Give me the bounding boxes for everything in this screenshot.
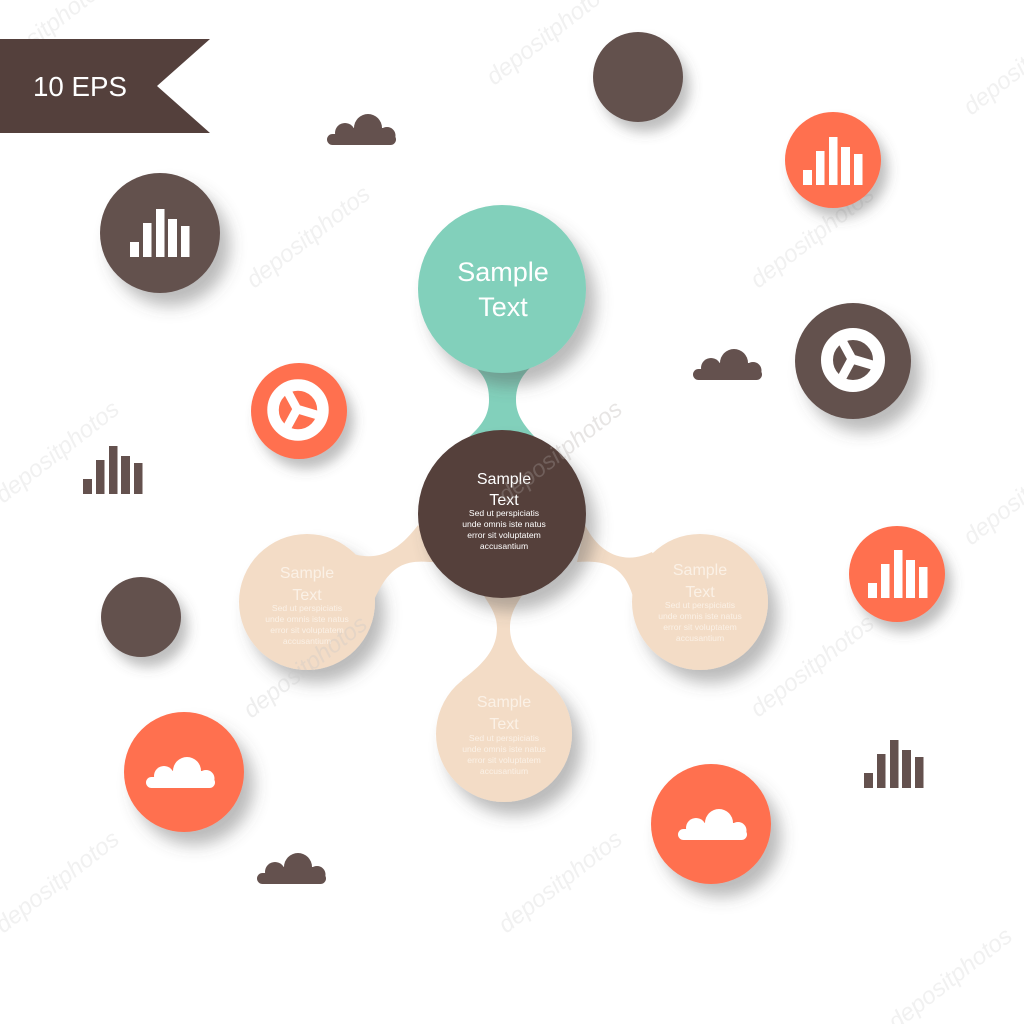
- orange circle with cloud icon lower: [651, 764, 771, 884]
- watermark: depositphotos: [493, 825, 628, 939]
- node text right: error sit voluptatem: [663, 622, 737, 632]
- orange circle with wheel icon: [251, 363, 347, 459]
- node: bottom beige: [436, 666, 572, 802]
- cloud icon right: [693, 349, 762, 380]
- orange circle with cloud icon left: [124, 712, 244, 832]
- node text center: Sed ut perspiciatis: [469, 508, 539, 518]
- dark circle with wheel icon: [795, 303, 911, 419]
- ribbon banner: [0, 39, 210, 133]
- node text center: unde omnis iste natus: [462, 519, 546, 529]
- node text left: Sample: [280, 565, 334, 582]
- node text center: accusantium: [480, 541, 528, 551]
- bar chart icon left: [83, 446, 142, 494]
- node: left beige: [239, 534, 375, 670]
- node: dark center: [418, 430, 586, 598]
- bar chart icon lower right: [864, 740, 924, 788]
- connector: right: [577, 525, 660, 600]
- node text bottom: Sed ut perspiciatis: [469, 733, 539, 743]
- node text center: error sit voluptatem: [467, 530, 541, 540]
- cloud icon top: [327, 114, 396, 145]
- node: right beige: [632, 534, 768, 670]
- node text center: Sample: [477, 471, 531, 488]
- node text bottom: accusantium: [480, 766, 528, 776]
- node text bottom: Text: [489, 716, 519, 733]
- node text right: unde omnis iste natus: [658, 611, 742, 621]
- node text right: [658, 562, 742, 643]
- node text center: [462, 471, 546, 551]
- node text left: unde omnis iste natus: [265, 614, 349, 624]
- banner label: 10 EPS: [33, 71, 127, 102]
- node: teal top: [418, 205, 586, 373]
- node text left: error sit voluptatem: [270, 625, 344, 635]
- connector: bottom: [462, 590, 546, 690]
- connector: left: [342, 525, 445, 600]
- watermark over center: depositphotos: [493, 395, 628, 509]
- node text bottom: error sit voluptatem: [467, 755, 541, 765]
- node text left: Sed ut perspiciatis: [272, 603, 342, 613]
- cloud icon bottom: [257, 853, 326, 884]
- node text right: Sed ut perspiciatis: [665, 600, 735, 610]
- node text left: Text: [292, 587, 322, 604]
- watermark: depositphotos: [241, 180, 376, 294]
- plain dark circle left: [101, 577, 181, 657]
- node text top: [457, 257, 549, 322]
- node text center: Text: [489, 492, 519, 509]
- node text top: Sample: [457, 257, 549, 287]
- plain dark circle top: [593, 32, 683, 122]
- dark circle with bar chart icon: [100, 173, 220, 293]
- watermark: depositphotos: [745, 609, 880, 723]
- node text left: [265, 565, 349, 646]
- watermark: depositphotos: [745, 180, 880, 294]
- node text right: Sample: [673, 562, 727, 579]
- watermark over left node: depositphotos: [238, 610, 373, 724]
- node text right: accusantium: [676, 633, 724, 643]
- node text bottom: Sample: [477, 694, 531, 711]
- node text top: Text: [478, 292, 528, 322]
- node text left: accusantium: [283, 636, 331, 646]
- orange circle with bar chart icon right: [849, 526, 945, 622]
- node text bottom: [462, 694, 546, 776]
- node text bottom: unde omnis iste natus: [462, 744, 546, 754]
- node text right: Text: [685, 584, 715, 601]
- orange circle with bar chart icon top right: [785, 112, 881, 208]
- connector: teal: [465, 360, 540, 436]
